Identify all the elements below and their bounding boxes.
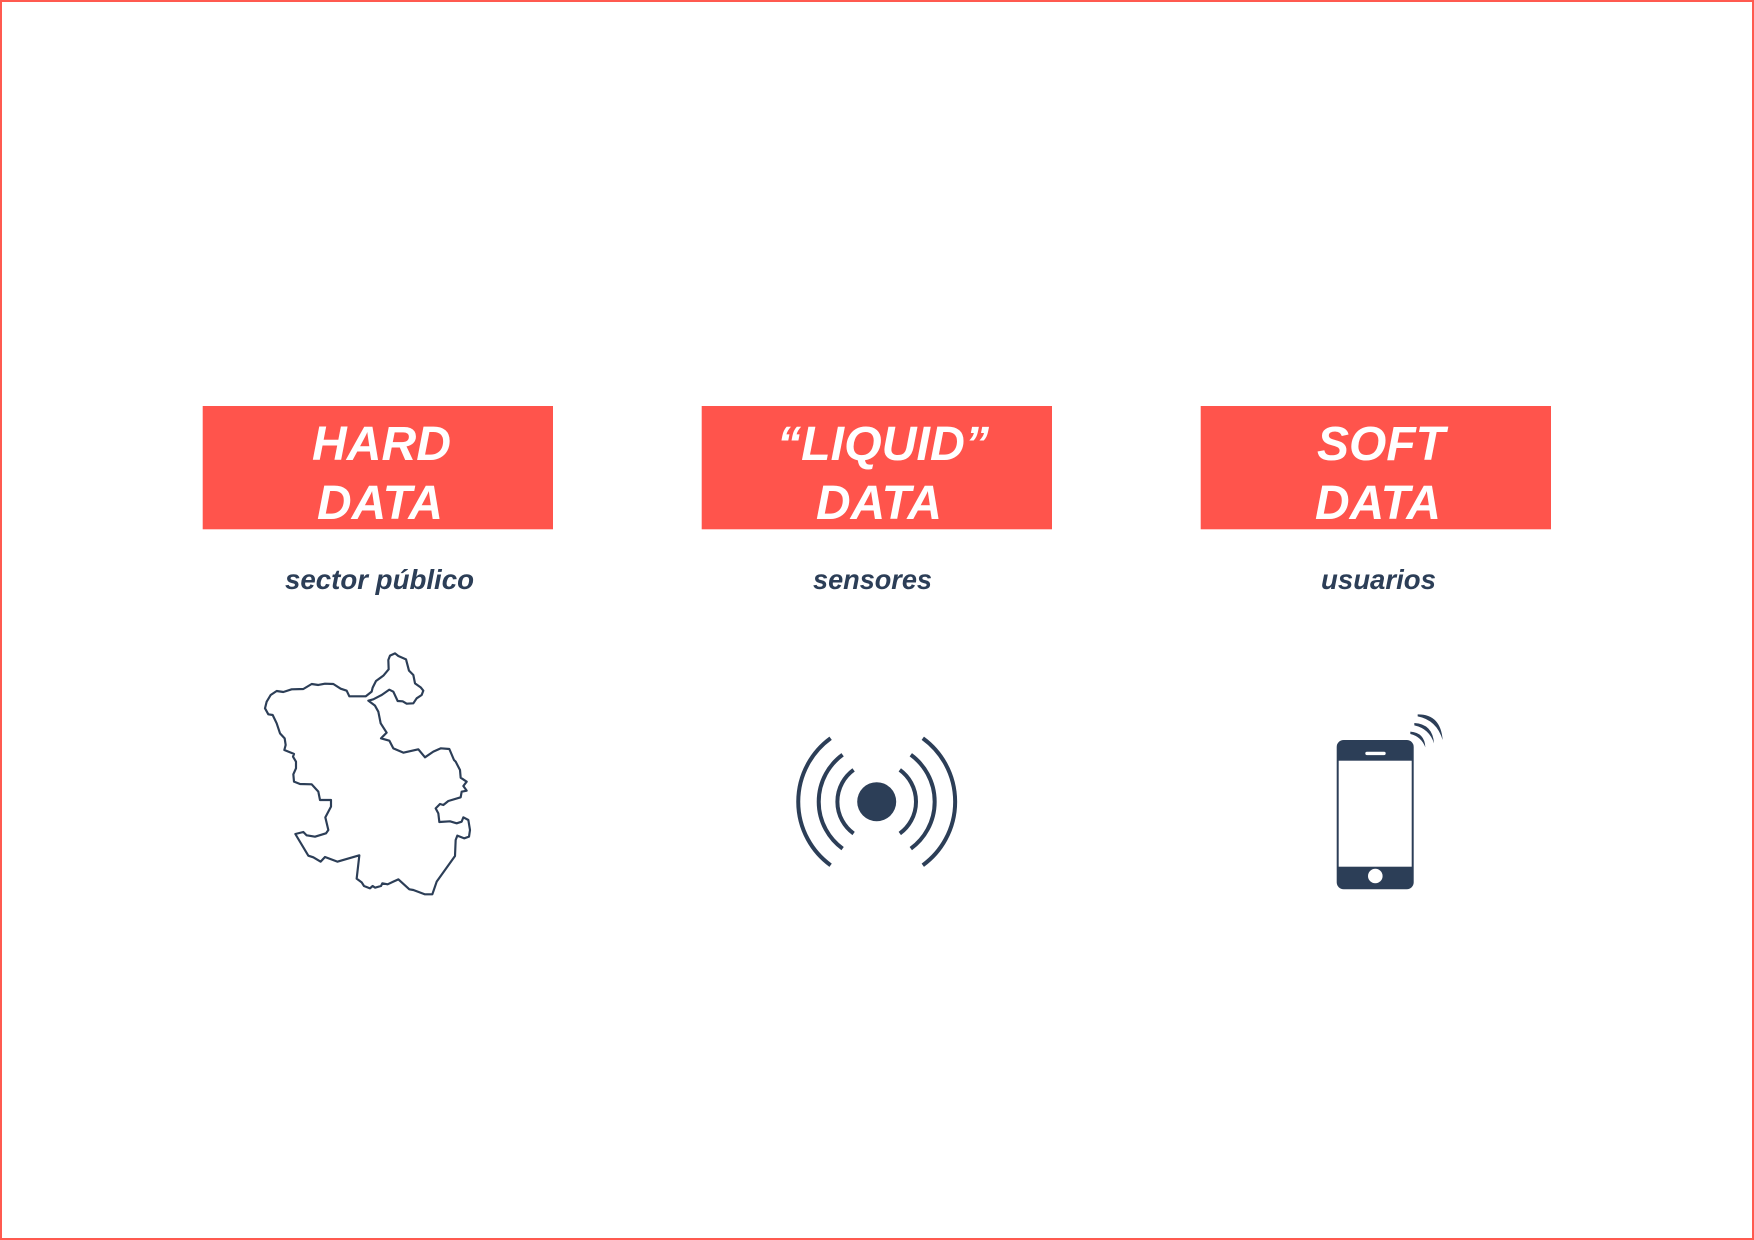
heading box: liquid data bbox=[702, 406, 1052, 530]
heading box: liquid data: “LIQUID” bbox=[777, 418, 989, 471]
heading box: soft data: DATA bbox=[1315, 477, 1441, 530]
heading box: hard data bbox=[203, 406, 553, 530]
subtitle: usuarios: usuarios bbox=[1321, 564, 1436, 595]
panel: soft data bbox=[1201, 406, 1551, 889]
subtitle: sensores: sensores bbox=[813, 564, 932, 595]
panel: liquid data bbox=[702, 406, 1052, 865]
heading box: hard data: DATA bbox=[317, 477, 443, 530]
subtitle: sector público: sector público bbox=[285, 564, 474, 595]
heading box: soft data: SOFT bbox=[1317, 418, 1449, 471]
heading box: hard data: HARD bbox=[312, 418, 451, 471]
heading box: liquid data: DATA bbox=[816, 477, 942, 530]
icon: region map outline bbox=[265, 653, 470, 894]
heading box: soft data bbox=[1201, 406, 1551, 530]
icon: sensor signal bbox=[798, 738, 955, 865]
panel: hard data bbox=[203, 406, 553, 894]
icon: smartphone with signal bbox=[1337, 714, 1443, 889]
